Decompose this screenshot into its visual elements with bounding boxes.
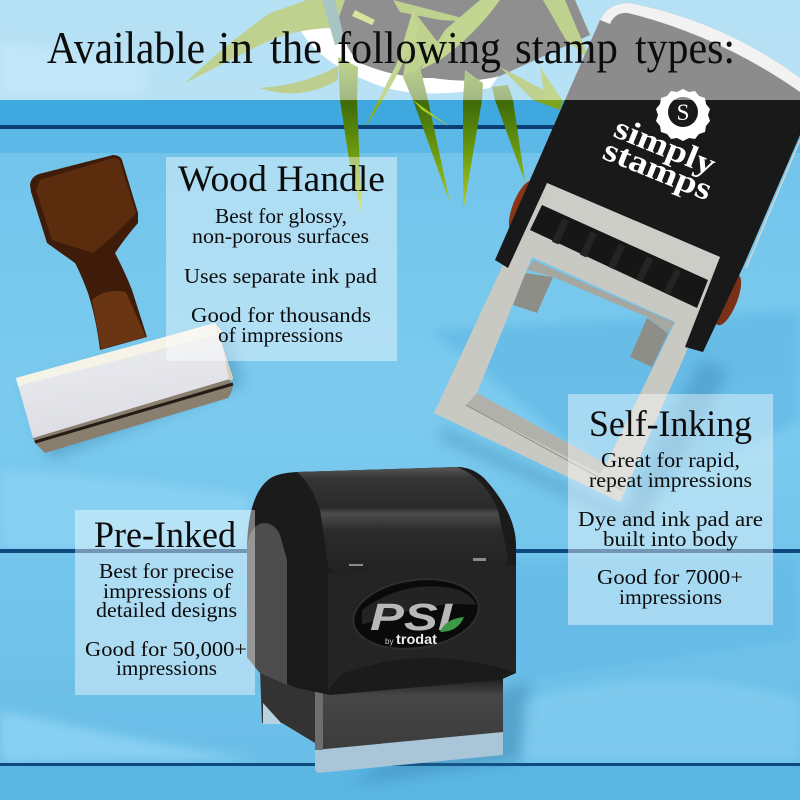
- plant and pot: [185, 0, 590, 217]
- text: pre-inked details: detailed designs: [96, 598, 237, 622]
- base block: [33, 378, 233, 453]
- heading: pre-inked: Pre-Inked: [94, 515, 236, 556]
- black body: [495, 3, 800, 352]
- PSI logo: PSI: [370, 597, 454, 639]
- heading: self-inking: Self-Inking: [589, 404, 752, 445]
- title: Available: [47, 23, 205, 73]
- self-inking stamp: [434, 3, 800, 530]
- title: following: [337, 23, 501, 73]
- panel: pre-inked: [75, 510, 255, 695]
- body: [247, 467, 516, 695]
- pot: [300, 0, 510, 93]
- PSI logo: [349, 572, 483, 656]
- PSI logo: by: [385, 637, 393, 646]
- side knobs: [504, 178, 540, 234]
- wood handle stamp: [16, 155, 245, 460]
- shadow: [440, 360, 730, 530]
- title: [47, 23, 735, 73]
- lower side: [260, 670, 320, 743]
- text: wood handle details: of impressions: [218, 323, 343, 347]
- mechanism behind window: [513, 273, 553, 313]
- front face: [328, 565, 516, 690]
- text: self-inking details: repeat impressions: [589, 468, 752, 492]
- text: self-inking details: impressions: [619, 585, 722, 609]
- title band overlay: [0, 0, 800, 100]
- title: types:: [635, 23, 735, 73]
- text: wood handle details: Uses separate ink pad: [184, 264, 378, 288]
- heading: wood handle: Wood Handle: [178, 159, 385, 200]
- metal frame: [434, 183, 720, 502]
- ink slot: [530, 205, 708, 308]
- hanging leaves: [365, 10, 418, 127]
- title: stamp: [515, 23, 618, 73]
- light band: [542, 183, 720, 280]
- upper leaves: [185, 0, 345, 83]
- pre-inked PSI stamp: [247, 467, 530, 785]
- simply stamps logo: [598, 89, 721, 207]
- simply stamps logo: stamps: [598, 131, 718, 207]
- text: wood handle details: [184, 204, 378, 347]
- text: pre-inked details: impressions of: [103, 579, 231, 603]
- shadow: [22, 330, 245, 460]
- handle: [30, 155, 147, 350]
- text: pre-inked details: Good for 50,000+: [85, 637, 247, 661]
- text: wood handle details: Good for thousands: [191, 303, 371, 327]
- title: in: [218, 23, 253, 73]
- PSI logo: trodat: [396, 631, 437, 647]
- text: self-inking details: [578, 448, 763, 609]
- text: pre-inked details: Best for precise: [99, 559, 234, 583]
- text: wood handle details: Best for glossy,: [215, 204, 347, 228]
- text: pre-inked details: impressions: [116, 656, 217, 680]
- lower front box: [315, 677, 503, 750]
- text: self-inking details: Great for rapid,: [601, 448, 740, 472]
- text: self-inking details: Dye and ink pad are: [578, 507, 763, 531]
- title: the: [270, 23, 322, 73]
- clear base: [315, 732, 503, 773]
- panel: wood handle: [166, 157, 397, 361]
- shadow: [350, 680, 530, 785]
- panel: self-inking: [568, 394, 773, 625]
- simply stamps logo: simply: [609, 109, 721, 182]
- side panel: [247, 523, 287, 685]
- text: wood handle details: non-porous surfaces: [192, 224, 369, 248]
- text: pre-inked details: [85, 559, 247, 680]
- text: self-inking details: built into body: [603, 527, 739, 551]
- lid: [297, 467, 508, 573]
- simply stamps logo: S: [677, 100, 689, 125]
- text: self-inking details: Good for 7000+: [597, 565, 743, 589]
